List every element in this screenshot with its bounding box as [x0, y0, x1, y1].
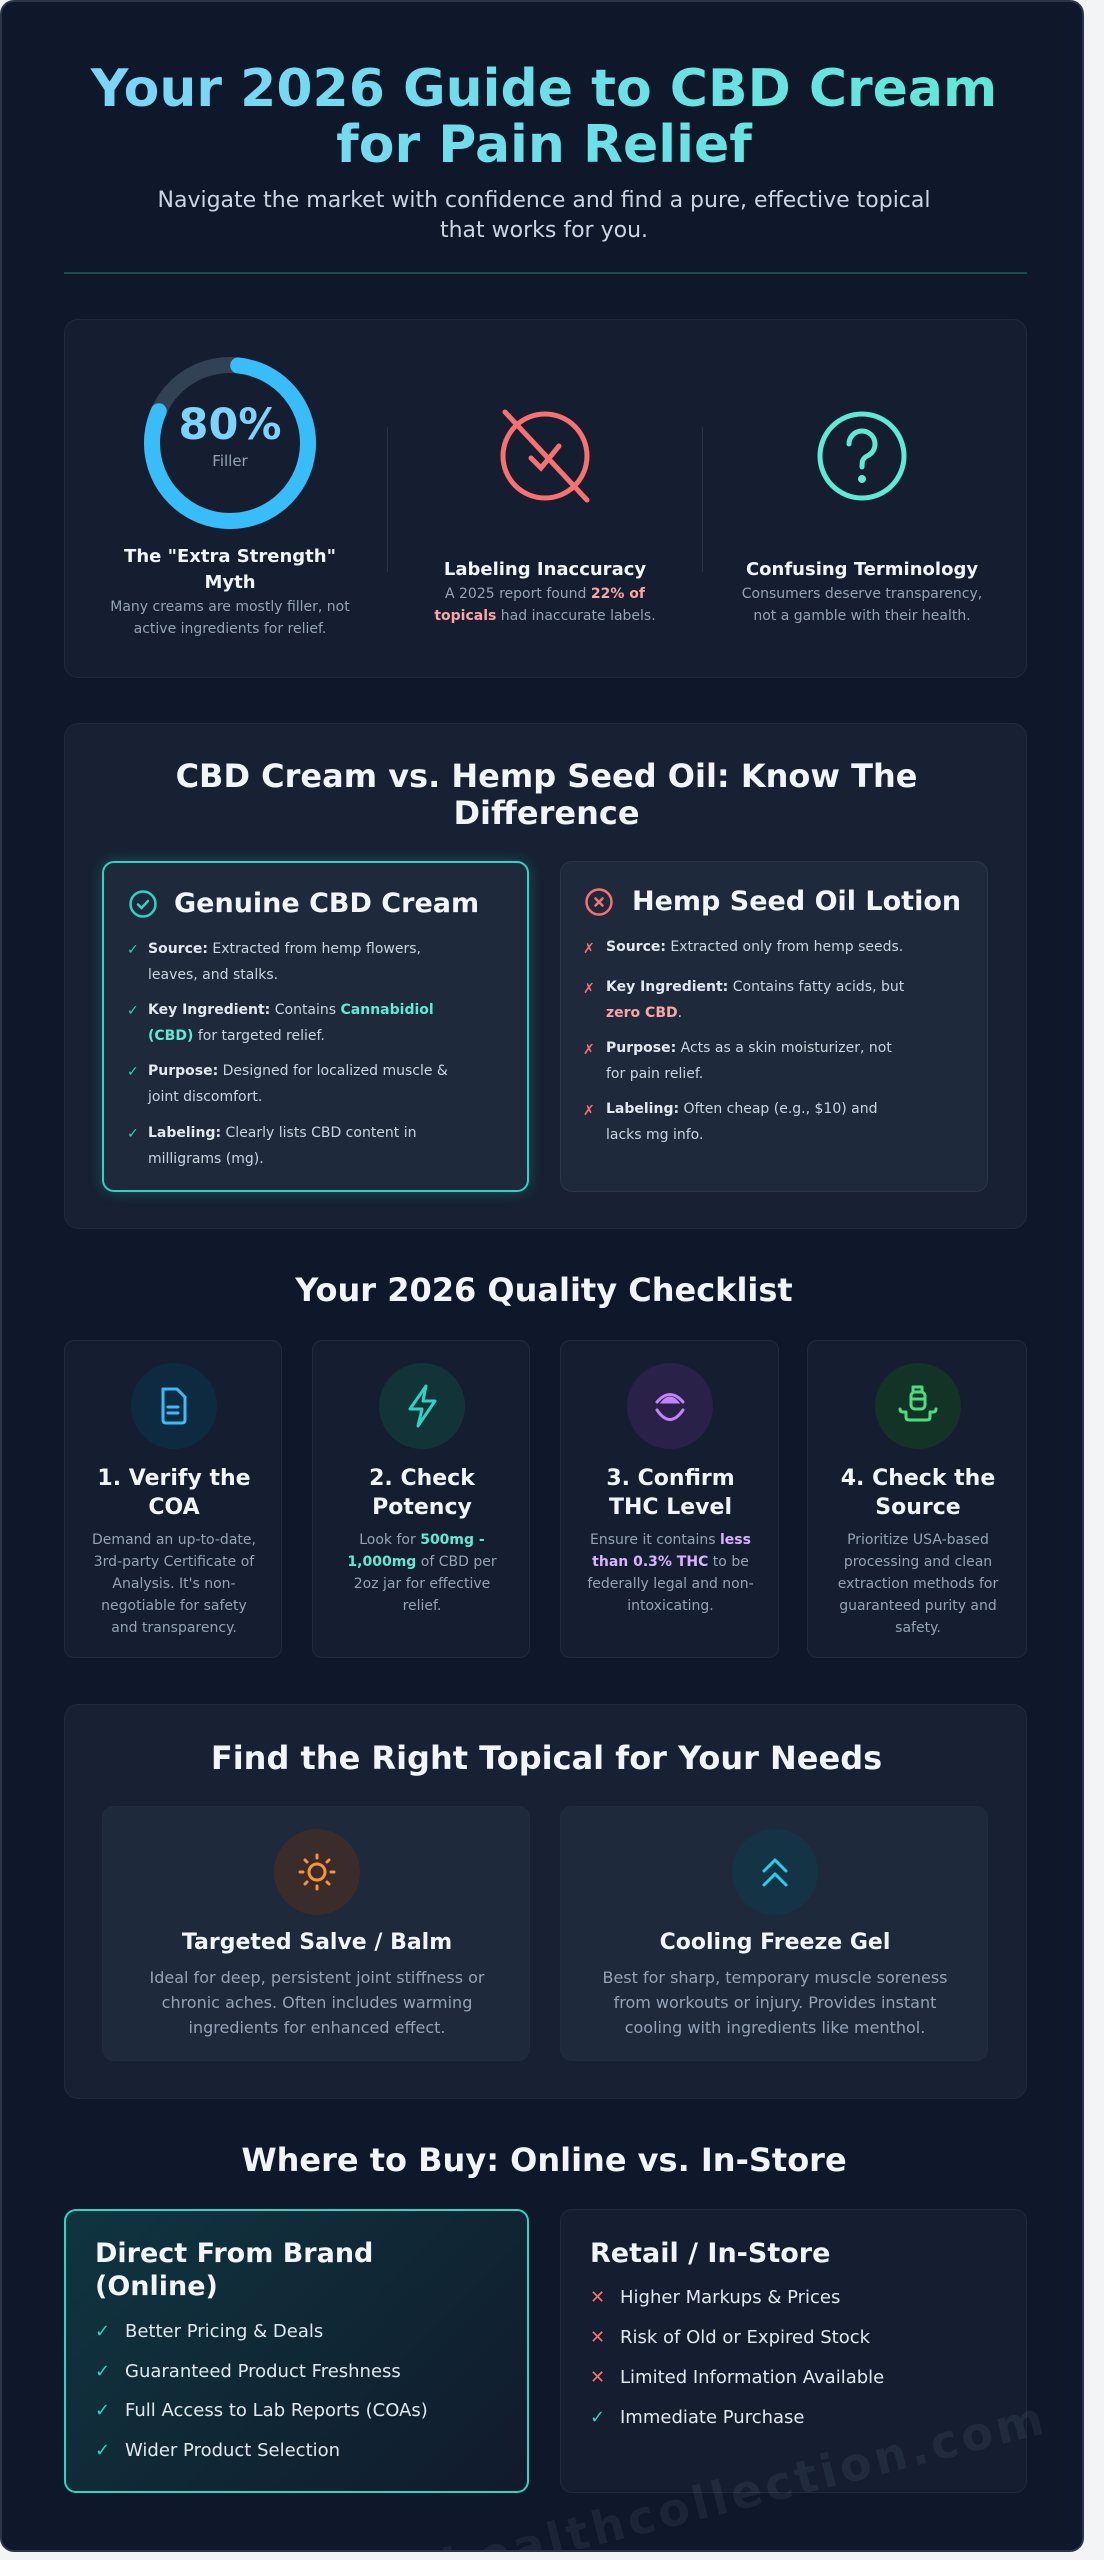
card: check source: safety. [895, 1620, 941, 1636]
card: hemp seed oil lotion: ✗ [583, 981, 595, 997]
icon: question [818, 412, 906, 500]
card: genuine CBD cream [102, 861, 529, 1192]
panel: problem stats [64, 319, 1027, 678]
card: direct from brand: ✓ [95, 2440, 110, 2461]
text: extra strength myth: active ingredients for relief. [134, 621, 326, 637]
card: check potency: 1,000mg of CBD per [347, 1554, 497, 1570]
card: targeted salve: Targeted Salve / Balm [182, 1930, 452, 1955]
heading: quality checklist: Your 2026 Quality Checklist [295, 1271, 793, 1309]
icon: plant source [875, 1363, 961, 1449]
card: verify COA: Demand an up-to-date, [92, 1532, 256, 1548]
card: check source: processing and clean [844, 1554, 992, 1570]
chart: 80% filler donut: Filler [212, 452, 248, 470]
icon: x circle [585, 888, 613, 916]
card: targeted salve: ingredients for enhanced effect. [188, 2018, 446, 2037]
card: check potency: relief. [403, 1598, 441, 1614]
title: Your 2026 Guide to CBD Cream [91, 59, 997, 119]
card: verify COA: and transparency. [111, 1620, 237, 1636]
heading: Difference [453, 794, 640, 832]
card: hemp seed oil lotion [560, 861, 988, 1192]
card: targeted salve [102, 1806, 530, 2061]
card: check potency: 2. Check [369, 1466, 475, 1491]
card: hemp seed oil lotion: Source: Extracted only from hemp seeds. [606, 939, 903, 955]
text: labeling inaccuracy [434, 559, 656, 624]
card: retail in-store: Limited Information Available [620, 2367, 884, 2388]
card: genuine CBD cream: (CBD) for targeted relief. [148, 1028, 325, 1044]
title [22, 61, 1066, 173]
card: hemp seed oil lotion: lacks mg info. [606, 1127, 703, 1143]
text: labeling inaccuracy: Labeling Inaccuracy [444, 559, 646, 580]
text: extra strength myth: The "Extra Strength" [124, 546, 336, 567]
card: confirm THC: THC Level [609, 1495, 732, 1520]
card: direct from brand: Direct From Brand [95, 2238, 373, 2269]
subtitle: Navigate the market with confidence and find a pure, effective topical [158, 188, 930, 213]
card: check source: guaranteed purity and [839, 1598, 997, 1614]
text: confusing terminology [742, 559, 982, 624]
text: labeling inaccuracy: A 2025 report found 22% of [445, 586, 645, 602]
icon: eye [627, 1363, 713, 1449]
text: extra strength myth: Myth [204, 572, 256, 593]
card: genuine CBD cream: ✓ [127, 1064, 139, 1080]
icon: document [131, 1363, 217, 1449]
card: genuine CBD cream: ✓ [127, 942, 139, 958]
card: retail in-store: ✕ [590, 2367, 605, 2388]
card: genuine CBD cream: ✓ [127, 1003, 139, 1019]
text: confusing terminology: Consumers deserve transparency, [742, 586, 982, 602]
icon: label inaccuracy [500, 410, 590, 502]
card: genuine CBD cream: Key Ingredient: Contains Cannabidiol [148, 1002, 434, 1018]
card: hemp seed oil lotion: Labeling: Often cheap (e.g., $10) and [606, 1101, 878, 1117]
card: confirm THC: than 0.3% THC to be [592, 1554, 749, 1570]
card: retail in-store [560, 2209, 1027, 2493]
card: cooling gel [560, 1806, 988, 2061]
card: confirm THC: Ensure it contains less [590, 1532, 751, 1548]
card: direct from brand: Full Access to Lab Reports (COAs) [125, 2400, 428, 2421]
subtitle [158, 188, 930, 243]
icon: bolt [379, 1363, 465, 1449]
card: retail in-store: ✕ [590, 2327, 605, 2348]
card: check source [807, 1340, 1027, 1658]
card: retail in-store: ✕ [590, 2287, 605, 2308]
card: genuine CBD cream: Source: Extracted from hemp flowers, [148, 941, 421, 957]
panel: comparison [64, 723, 1027, 1229]
card: cooling gel: cooling with ingredients like menthol. [625, 2018, 925, 2037]
title: for Pain Relief [336, 115, 752, 175]
card: check potency [312, 1340, 530, 1658]
card: confirm THC: federally legal and non- [587, 1576, 754, 1592]
card: direct from brand: ✓ [95, 2400, 110, 2421]
card: cooling gel: Cooling Freeze Gel [660, 1930, 890, 1955]
card: verify COA: 1. Verify the [97, 1466, 251, 1491]
card: genuine CBD cream: leaves, and stalks. [148, 967, 278, 983]
card: genuine CBD cream: Labeling: Clearly lists CBD content in [148, 1125, 416, 1141]
card: hemp seed oil lotion: zero CBD. [606, 1005, 682, 1021]
card: genuine CBD cream: Purpose: Designed for localized muscle & [148, 1063, 448, 1079]
card: check source: Prioritize USA-based [847, 1532, 989, 1548]
card: check potency: 2oz jar for effective [354, 1576, 490, 1592]
card: verify COA: 3rd-party Certificate of [94, 1554, 254, 1570]
card: hemp seed oil lotion: Key Ingredient: Contains fatty acids, but [606, 979, 904, 995]
heading: where to buy: Where to Buy: Online vs. In-Store [241, 2141, 847, 2179]
card: hemp seed oil lotion: for pain relief. [606, 1066, 703, 1082]
chart: 80% filler donut [144, 357, 316, 529]
card: targeted salve: Ideal for deep, persistent joint stiffness or [150, 1968, 484, 1987]
card: retail in-store: Retail / In-Store [590, 2238, 830, 2269]
card: check source: 4. Check the [841, 1466, 995, 1491]
card: confirm THC: 3. Confirm [606, 1466, 735, 1491]
card: direct from brand: Better Pricing & Deals [125, 2321, 323, 2342]
text: extra strength myth: Many creams are mostly filler, not [110, 599, 350, 615]
card: hemp seed oil lotion: Purpose: Acts as a skin moisturizer, not [606, 1040, 892, 1056]
card: hemp seed oil lotion: ✗ [583, 1042, 595, 1058]
card: direct from brand: (Online) [95, 2271, 218, 2302]
card: check source: Source [875, 1495, 961, 1520]
card: retail in-store: Higher Markups & Prices [620, 2287, 840, 2308]
heading: Find the Right Topical for Your Needs [211, 1739, 882, 1777]
card: hemp seed oil lotion: Hemp Seed Oil Lotion [632, 886, 961, 917]
card: genuine CBD cream: Genuine CBD Cream [174, 888, 479, 919]
card: check source: extraction methods for [838, 1576, 998, 1592]
card: verify COA: negotiable for safety [101, 1598, 247, 1614]
card: verify COA: COA [148, 1495, 200, 1520]
card: direct from brand [64, 2209, 529, 2493]
card: retail in-store: ✓ [590, 2407, 605, 2428]
card: confirm THC [560, 1340, 779, 1658]
card: confirm THC: intoxicating. [627, 1598, 714, 1614]
heading: CBD Cream vs. Hemp Seed Oil: Know The [176, 757, 917, 795]
card: direct from brand: ✓ [95, 2321, 110, 2342]
icon: check circle [129, 890, 157, 918]
card: direct from brand: Wider Product Selection [125, 2440, 340, 2461]
card: genuine CBD cream: joint discomfort. [148, 1089, 262, 1105]
card: direct from brand: Guaranteed Product Freshness [125, 2361, 401, 2382]
card: targeted salve: chronic aches. Often includes warming [162, 1993, 472, 2012]
card: cooling gel: Best for sharp, temporary muscle soreness [602, 1968, 948, 1987]
card: verify COA [64, 1340, 282, 1658]
card: direct from brand: ✓ [95, 2361, 110, 2382]
icon: chevrons up [732, 1829, 818, 1915]
text: labeling inaccuracy: topicals had inaccurate labels. [434, 608, 656, 624]
card: hemp seed oil lotion: ✗ [583, 1103, 595, 1119]
card: hemp seed oil lotion: ✗ [583, 941, 595, 957]
text: extra strength myth [110, 546, 350, 637]
card: genuine CBD cream: milligrams (mg). [148, 1151, 264, 1167]
card: cooling gel: from workouts or injury. Provides instant [614, 1993, 936, 2012]
panel: topicals [64, 1704, 1027, 2099]
card: check potency: Potency [372, 1495, 472, 1520]
card: retail in-store: Risk of Old or Expired Stock [620, 2327, 870, 2348]
text: confusing terminology: not a gamble with their health. [753, 608, 971, 624]
text: confusing terminology: Confusing Terminology [746, 559, 978, 580]
card: genuine CBD cream: ✓ [127, 1126, 139, 1142]
subtitle: that works for you. [440, 218, 648, 243]
card: check potency: Look for 500mg - [359, 1532, 485, 1548]
card: retail in-store: Immediate Purchase [620, 2407, 804, 2428]
chart: 80% filler donut: 80% [179, 400, 281, 450]
card: verify COA: Analysis. It's non- [112, 1576, 236, 1592]
icon: sun [274, 1829, 360, 1915]
heading [176, 757, 917, 832]
